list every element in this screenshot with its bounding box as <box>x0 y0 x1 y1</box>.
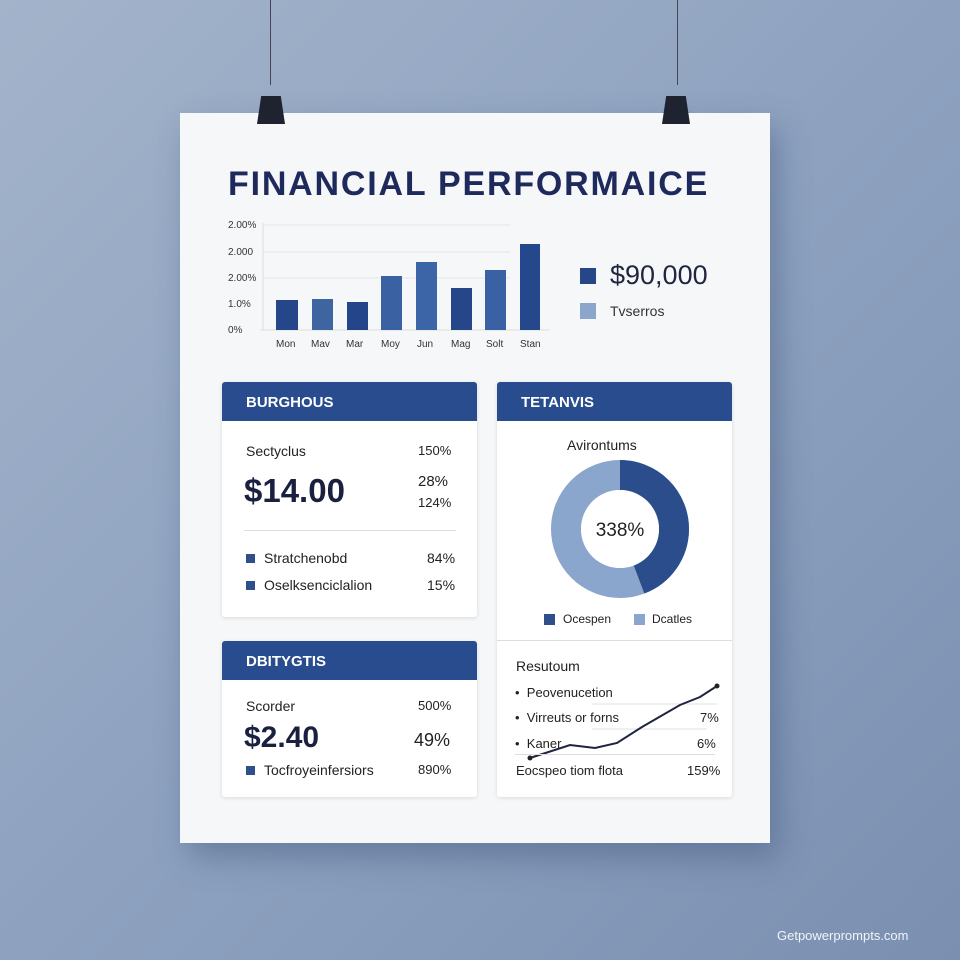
panel: burghous: Sectyclus <box>246 443 306 459</box>
donut chart <box>551 460 689 598</box>
panel: tetanvis <box>497 382 732 797</box>
panel: burghous: 150% <box>418 443 451 458</box>
legend: $90,000 <box>610 260 708 290</box>
panel: tetanvis: TETANVIS <box>521 394 594 411</box>
panel: burghous: 124% <box>418 495 451 510</box>
panel: debitogtis <box>222 641 477 797</box>
panel: burghous: 84% <box>427 550 455 566</box>
legend: Tvserros <box>610 303 664 319</box>
bar chart: Mar <box>346 339 364 350</box>
panel: tetanvis: 159% <box>687 763 720 778</box>
panel: burghous: 28% <box>418 473 448 490</box>
bar chart: Moy <box>381 339 400 350</box>
panel: debitogtis: 500% <box>418 698 451 713</box>
clip: right <box>662 96 690 124</box>
panel: debitogtis: 49% <box>414 730 450 750</box>
panel: debitogtis: 890% <box>418 762 451 777</box>
bar chart: 2.00% <box>228 220 256 231</box>
panel: tetanvis: 6% <box>697 736 716 751</box>
watermark: Getpowerprompts.com <box>777 928 908 943</box>
panel: tetanvis: • Peovenucetion <box>515 685 613 700</box>
bar chart: 2.000 <box>228 247 253 258</box>
panel: burghous: Stratchenobd <box>264 550 347 566</box>
panel: tetanvis: Avirontums <box>567 437 637 453</box>
panel: debitogtis: DBITYGTIS <box>246 653 326 670</box>
title: FINANCIAL PERFORMAICE <box>228 165 709 203</box>
bar chart: Solt <box>486 339 503 350</box>
panel: tetanvis: • Kaner <box>515 736 561 751</box>
bar chart: Jun <box>417 339 433 350</box>
poster <box>180 113 770 843</box>
panel: debitogtis: Scorder <box>246 698 295 714</box>
panel: tetanvis: Ocespen <box>563 612 611 626</box>
panel: tetanvis: Dcatles <box>652 612 692 626</box>
bar chart: Mav <box>311 339 330 350</box>
panel: burghous <box>222 382 477 617</box>
bar chart: Mon <box>276 339 295 350</box>
bar chart <box>228 220 550 350</box>
panel: burghous: Oselksenciclalion <box>264 577 372 593</box>
string: right <box>677 0 678 85</box>
string: left <box>270 0 271 85</box>
panel: debitogtis: Tocfroyeinfersiors <box>264 762 374 778</box>
donut chart: 338% <box>596 520 644 541</box>
bar chart: 2.00% <box>228 273 256 284</box>
panel: tetanvis: • Virreuts or forns <box>515 710 619 725</box>
panel: burghous: BURGHOUS <box>246 394 334 411</box>
panel: debitogtis: $2.40 <box>244 721 319 754</box>
line chart <box>528 684 720 760</box>
legend <box>580 260 708 319</box>
bar chart: Stan <box>520 339 541 350</box>
bar chart: Mag <box>451 339 470 350</box>
bar chart: 0% <box>228 325 243 336</box>
panel: burghous: $14.00 <box>244 472 345 509</box>
clip: left <box>257 96 285 124</box>
panel: tetanvis: 7% <box>700 710 719 725</box>
bar chart: 1.0% <box>228 299 251 310</box>
panel: tetanvis: Resutoum <box>516 658 580 674</box>
panel: tetanvis: Eocspeo tiom flota <box>516 763 623 778</box>
panel: burghous: 15% <box>427 577 455 593</box>
